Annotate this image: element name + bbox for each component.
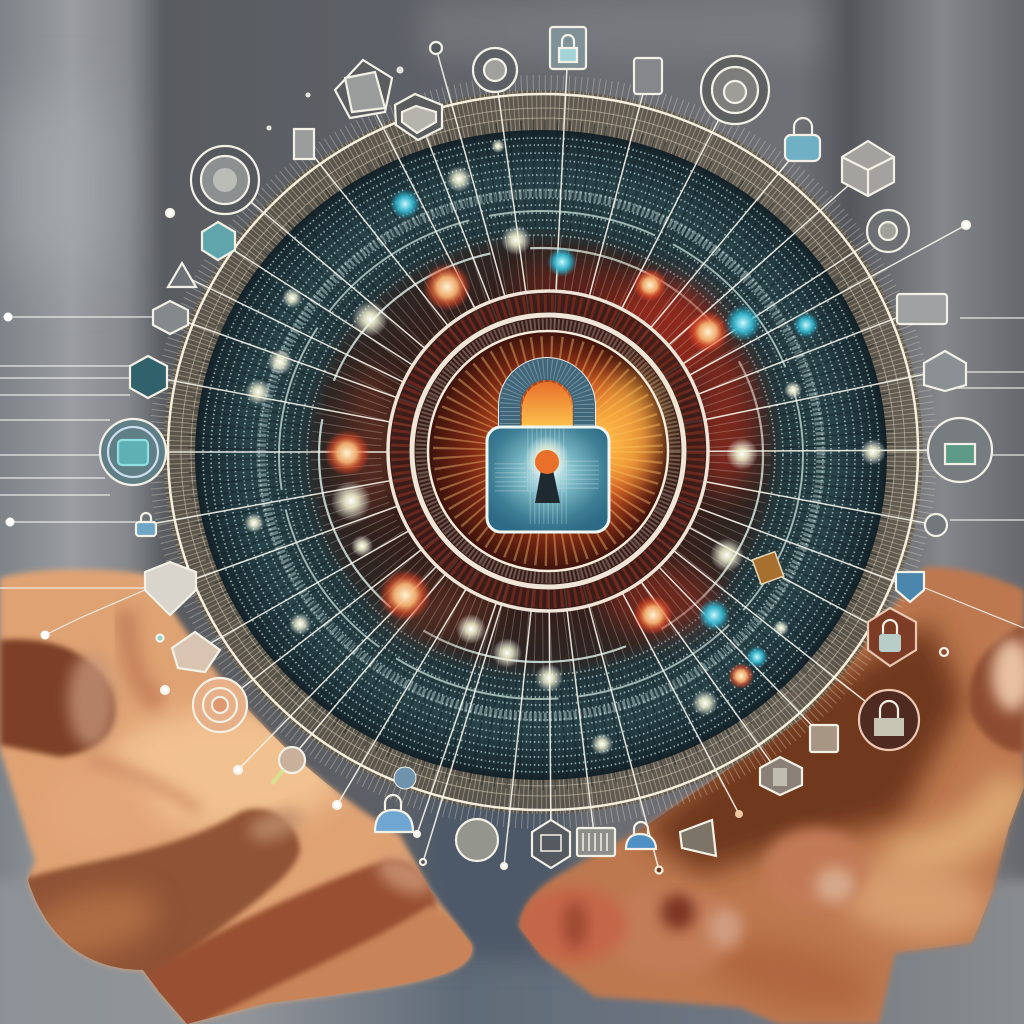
core sunburst — [478, 381, 618, 521]
right thumb — [969, 625, 1024, 752]
lock texture — [527, 460, 567, 492]
finger three — [190, 905, 478, 1024]
icon: hex bottom right — [760, 757, 802, 795]
outer ring icons — [100, 27, 992, 874]
icon: round node right — [867, 210, 909, 252]
core rim — [428, 331, 668, 571]
nodes: small top dots — [267, 67, 403, 130]
icon: lock hexagon — [868, 608, 916, 666]
icon: barcode box — [577, 828, 615, 856]
icon: small hex right — [925, 514, 947, 536]
icon: round seal — [473, 48, 517, 92]
line end dots — [8, 317, 45, 635]
icon: teal hexagon — [130, 356, 167, 398]
keyhole glow — [525, 436, 569, 480]
icon: blue padlock — [785, 118, 820, 161]
nodes: bottom left dots — [234, 766, 507, 869]
inner ring band — [388, 291, 708, 611]
icon: card — [897, 294, 947, 324]
icon: blue shield — [896, 572, 924, 602]
icon: document — [294, 129, 314, 159]
keyhole light — [535, 450, 559, 474]
icon: grey round badge — [456, 819, 498, 861]
icon: round lock lower right — [859, 690, 919, 750]
left thumb highlight — [68, 652, 116, 748]
icon: top lock card — [550, 27, 586, 69]
icon: hexagon lower left — [172, 632, 220, 672]
icon: polygon gem — [335, 60, 392, 118]
right palm — [519, 567, 1024, 1024]
shackle speckle — [510, 369, 584, 432]
left fingers — [15, 802, 478, 1024]
icon: blue padlock bottom — [375, 767, 416, 832]
icon: small lens lower left — [272, 747, 305, 784]
node: top dot — [430, 42, 442, 54]
glowing nodes — [244, 139, 886, 755]
outer hatched ring — [158, 84, 928, 820]
right fingers — [517, 828, 867, 975]
padlock — [487, 358, 609, 532]
horizontal data lines — [0, 317, 1024, 635]
icon: triangle badge — [168, 263, 196, 287]
lock shackle outline — [499, 358, 595, 432]
icon: square note — [810, 725, 838, 752]
right hand — [517, 567, 1024, 1024]
icon: bottom lock — [626, 822, 656, 849]
inner dark grid with red patches — [346, 263, 755, 640]
bright burst right of lock — [591, 375, 659, 485]
left palm shading — [94, 606, 348, 834]
icon: hex lock box — [395, 94, 442, 140]
outer white ring — [168, 94, 918, 810]
icon: shield left — [145, 562, 196, 615]
orange core — [428, 331, 668, 571]
icon: small blue lock left — [136, 513, 156, 536]
icon: large round lock left — [100, 419, 166, 485]
left palm — [0, 569, 472, 1024]
lock shackle — [510, 369, 584, 432]
right palm shading — [640, 620, 1015, 1024]
finger one — [20, 809, 300, 985]
finger two — [130, 860, 436, 1024]
nodes: left hand dots — [156, 634, 169, 694]
finger knuckle highlights — [244, 802, 306, 848]
icon: small hexagon — [153, 301, 188, 334]
node: bottom right dot — [735, 810, 743, 818]
node: left dot — [166, 209, 174, 217]
node: lock dot — [940, 648, 948, 656]
icon: bottom tag — [680, 820, 716, 856]
keyhole slot — [535, 470, 560, 503]
icon: hexagon shield — [202, 222, 235, 260]
right thumb highlight — [992, 639, 1024, 711]
icon: cube — [842, 141, 894, 196]
dark teal data disc — [195, 130, 887, 780]
icon: bottom hexagon — [532, 820, 570, 868]
finger knuckle right — [763, 828, 867, 912]
icon: round lock right — [928, 418, 992, 482]
shackle interior glow — [522, 382, 572, 430]
finger left — [517, 887, 627, 963]
left hand — [0, 569, 478, 1024]
icon: target lower left — [193, 678, 247, 732]
icon: round seal right — [701, 56, 769, 124]
network spokes — [133, 47, 966, 870]
finger middle — [624, 888, 726, 970]
lock body — [487, 427, 609, 532]
icon: square lock — [634, 58, 662, 94]
node: right dot — [962, 221, 970, 229]
icon: target top left — [191, 146, 259, 214]
icon: envelope hexagon — [924, 351, 966, 391]
node: bottom lock dot — [656, 866, 662, 874]
left thumb — [0, 639, 115, 757]
